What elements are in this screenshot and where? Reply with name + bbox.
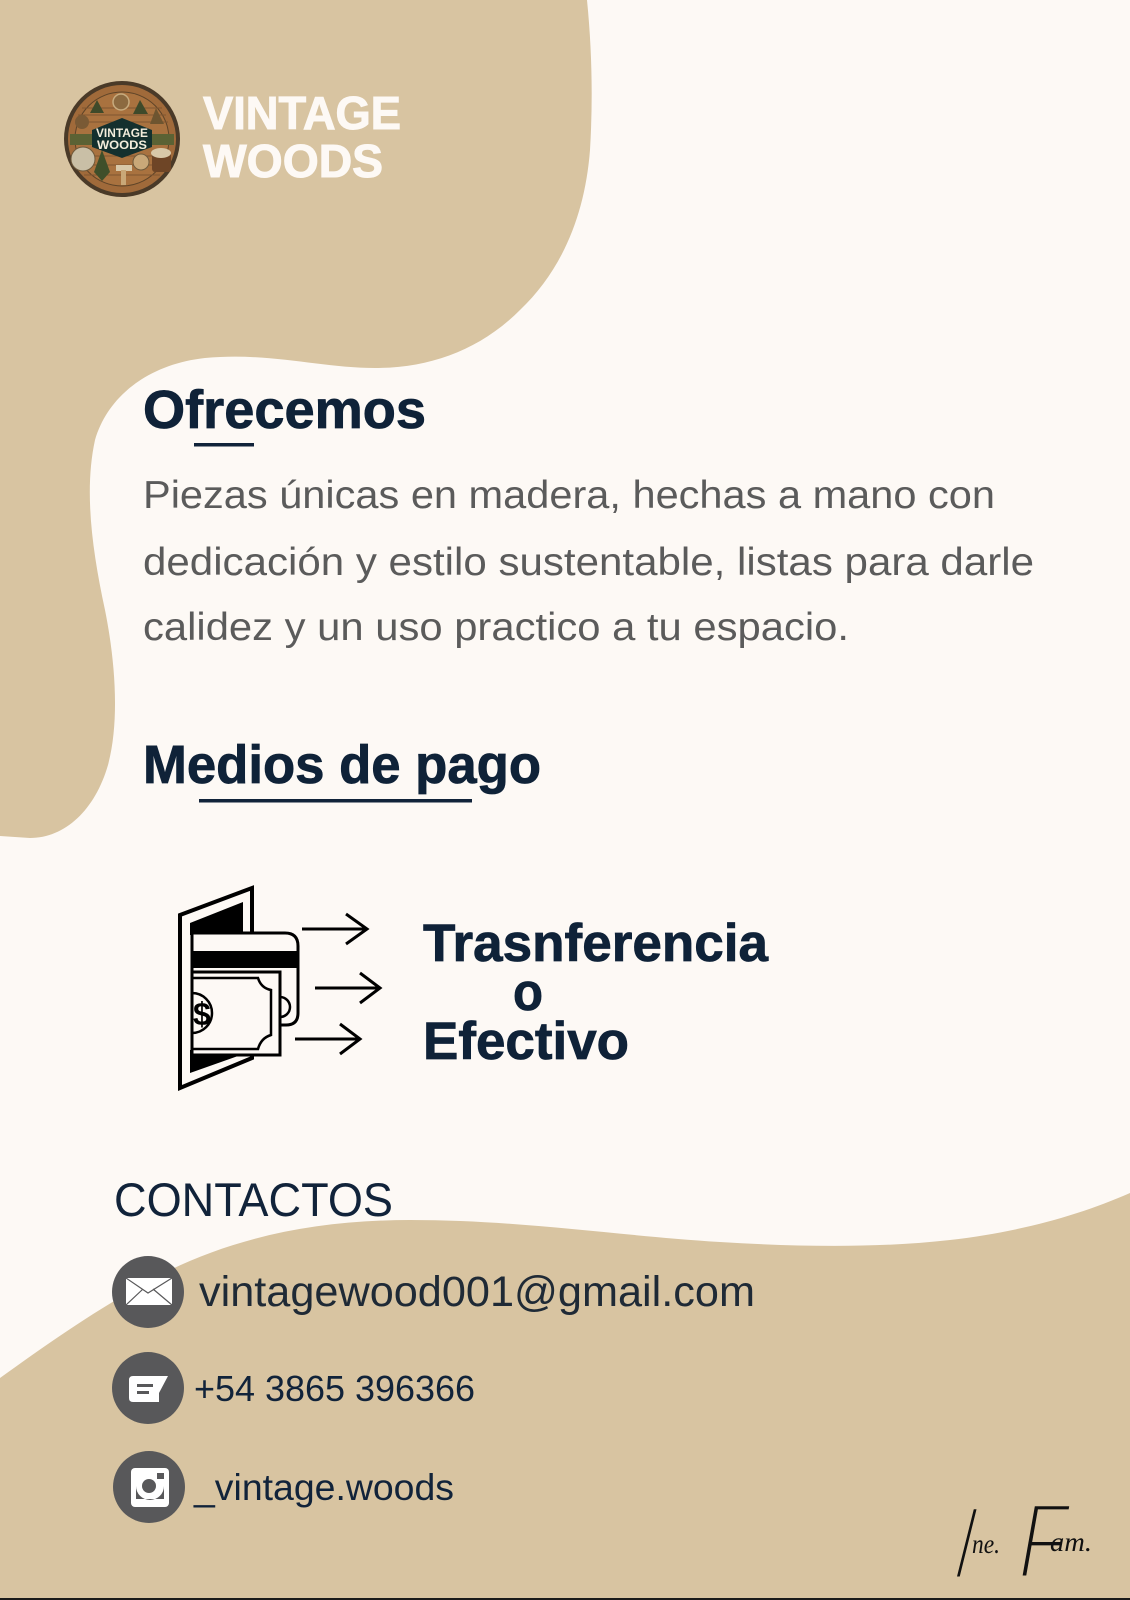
signature: F: [1010, 1481, 1079, 1600]
background shape: top-left beige blob: [0, 0, 592, 838]
icon: email: [112, 1256, 184, 1328]
text block: offer description: calidez y un uso practico a tu espacio.: [143, 606, 849, 649]
brand name: VINTAGE: [203, 87, 401, 139]
contact: phone number: +54 3865 396366: [194, 1368, 475, 1409]
brand name: [203, 87, 401, 187]
payment methods text: Efectivo: [423, 1012, 629, 1071]
heading: CONTACTOS: CONTACTOS: [114, 1173, 393, 1226]
logo: round wood badge: VINTAGE: [96, 126, 148, 140]
icon: wallet with card, banknote and arrows: $: [193, 996, 211, 1032]
text block: offer description: Piezas únicas en madera, hechas a mano con: [143, 474, 995, 517]
icon: phone message: [112, 1352, 184, 1424]
signature: ne.: [972, 1529, 1000, 1559]
contact: email address: vintagewood001@gmail.com: [199, 1268, 755, 1316]
heading underline: Ofrecemos: [194, 443, 254, 446]
background shape: bottom beige wave: [0, 1193, 1130, 1600]
logo: round wood badge: WOODS: [97, 138, 147, 152]
bottom edge line: [0, 1598, 1130, 1600]
signature: [938, 1481, 1092, 1600]
logo: round wood badge: [64, 81, 180, 197]
icon: wallet with card, banknote and arrows: [180, 888, 380, 1088]
brand name: WOODS: [203, 135, 383, 187]
text block: offer description: [143, 474, 1034, 649]
signature: am.: [1050, 1527, 1092, 1557]
heading: Medios de pago: Medios de pago: [143, 735, 541, 795]
payment methods text: Trasnferencia: [423, 914, 769, 973]
text block: offer description: dedicación y estilo sustentable, listas para darle: [143, 541, 1034, 584]
heading underline: Medios de pago: [199, 799, 472, 802]
icon: instagram: [113, 1451, 185, 1523]
payment methods text: [423, 914, 769, 1071]
heading: Ofrecemos: Ofrecemos: [143, 380, 426, 440]
payment methods text: o: [513, 963, 543, 1022]
contact: instagram handle: _vintage.woods: [193, 1467, 454, 1508]
